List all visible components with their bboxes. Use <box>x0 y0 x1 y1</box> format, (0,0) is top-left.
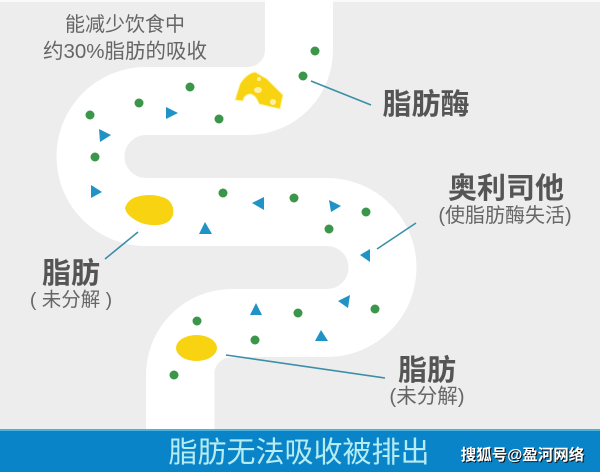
label: fat right: 脂肪 <box>398 354 456 387</box>
label: fat left: ( 未分解 ) <box>30 289 112 311</box>
top caption <box>43 13 207 63</box>
label: lipase: 脂肪酶 <box>382 88 470 121</box>
green dots <box>86 46 380 380</box>
bottom banner <box>0 429 600 472</box>
fat blob upper <box>125 195 173 225</box>
watermark: 搜狐号@盈河网络 <box>461 445 585 464</box>
fat blob lower <box>176 335 217 361</box>
label: fat left: 脂肪 <box>42 257 100 290</box>
leader lines <box>105 81 416 378</box>
label: orlistat: 奥利司他 <box>448 172 564 205</box>
label: fat right: (未分解) <box>389 385 465 408</box>
cheese <box>235 72 283 109</box>
label: fat right <box>389 354 465 408</box>
label: orlistat <box>438 172 572 227</box>
blue triangles <box>91 107 370 341</box>
top caption: 能减少饮食中 <box>65 13 185 36</box>
banner text: 脂肪无法吸收被排出 <box>168 436 430 469</box>
top caption: 约30%脂肪的吸收 <box>43 40 207 63</box>
intestine path <box>91 0 383 432</box>
label: fat left <box>30 257 112 311</box>
label: orlistat: (使脂肪酶失活) <box>438 204 572 227</box>
